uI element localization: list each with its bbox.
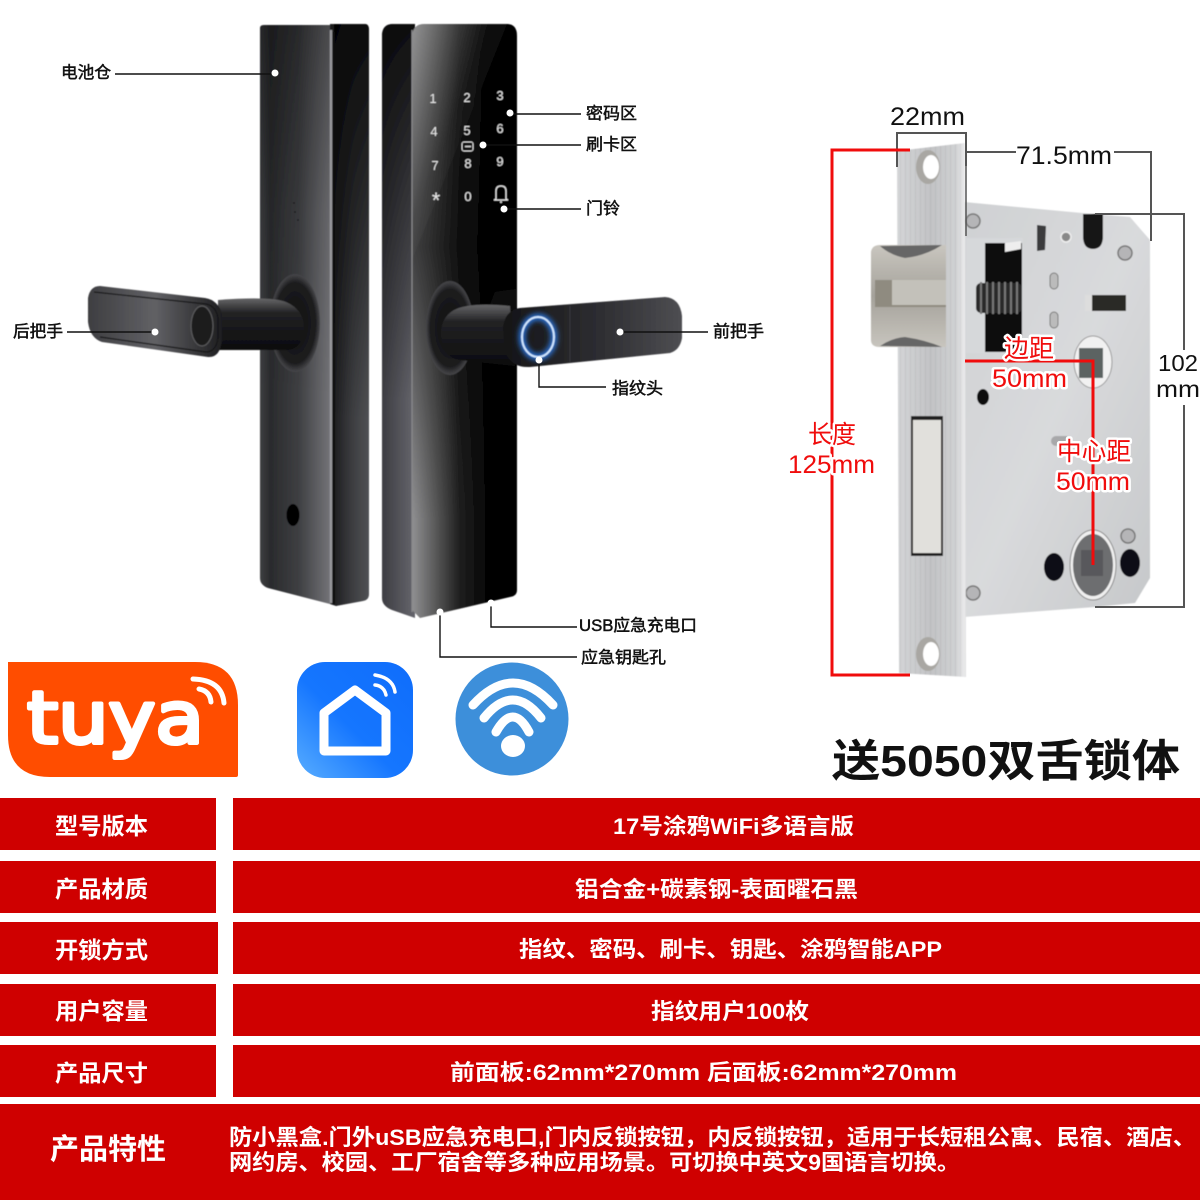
dimension: backset and center distance: 中心距 [1057,438,1131,466]
back handle neck [218,298,304,350]
dimension: backset and center distance: 50mm [1056,468,1130,496]
back panel top shading [260,25,330,400]
label: card area: 刷卡区 [586,135,637,154]
label: fingerprint head [536,356,663,398]
spec row: unlock method: 开锁方式 [55,937,148,963]
back panel front face [260,25,330,604]
spec row: model: 17号涂鸦WiFi多语言版 [613,814,854,839]
keypad [429,88,508,213]
front handle lever [503,297,682,367]
latch bolt [871,245,946,347]
back panel side face [330,24,369,606]
keypad: * [432,188,441,213]
spec row: model: 型号版本 [55,813,148,839]
keypad: 6 [496,121,504,136]
spec row: size: 前面板:62mm*270mm 后面板:62mm*270mm [450,1060,957,1085]
label: passcode area: 密码区 [586,104,637,123]
dimension: backset and center distance: 50mm [992,365,1067,393]
keypad: 2 [463,90,471,105]
spec row: user capacity [0,984,1200,1036]
label: front handle: 前把手 [713,322,764,341]
icon: tuya logo: tuya [27,676,204,760]
case holes and slots [977,214,1140,581]
spec row: material: 铝合金+碳素钢-表面曜石黑 [575,877,858,902]
spec row: user capacity: 指纹用户100枚 [651,999,809,1024]
dimension: length 125mm [788,150,910,675]
spec panel: features: 产品特性 [50,1133,166,1166]
dimension: 22mm: 22mm [890,103,965,131]
front panel gloss [412,24,507,260]
spec row: material: 产品材质 [55,876,148,902]
spec panel: features: 网约房、校园、工厂宿舍等多种应用场景。可切换中英文9国语言切换。 [229,1150,960,1175]
keypad: 4 [430,124,438,139]
fingerprint ring [522,317,554,357]
deadbolt [911,416,943,556]
screws [966,214,1135,600]
label: front handle [616,322,764,341]
keypad: 1 [429,91,437,106]
keypad: 9 [496,154,504,169]
front panel side shading [382,24,415,400]
lock case window [966,238,1023,353]
spec row: model [0,798,1200,850]
front panel glass face [412,24,517,618]
front panel glass shading [412,24,517,520]
label: passcode area [506,104,637,123]
dimension: 22mm [890,103,966,236]
spec row: size [0,1045,1200,1097]
dimension: length 125mm: 长度 [808,421,856,449]
spec panel: features [0,1104,1200,1200]
label: emergency keyhole [436,608,666,667]
icon: tuya logo [8,662,238,777]
label: USB emergency port [488,600,697,635]
dimension: 71.5mm: 71.5mm [1016,142,1112,170]
label: emergency keyhole: 应急钥匙孔 [581,648,666,667]
icon: smart home app [297,662,413,778]
spring [976,282,1022,314]
label: battery compartment [61,63,278,82]
keypad: 3 [496,88,504,103]
keypad: 7 [431,158,439,173]
back handle lever [88,286,222,357]
dimension: 71.5mm [966,142,1151,241]
label: USB emergency port: USB应急充电口 [579,616,697,635]
faceplate [897,143,966,677]
spec row: material [0,861,1200,913]
cylinder hole [1070,530,1116,600]
speaker dots [293,202,299,221]
front handle neck [441,305,515,366]
callout labels [13,63,764,667]
label: rear handle: 后把手 [13,322,63,341]
dimension: 102mm: mm [1156,376,1200,402]
dimension: backset and center distance: 边距 [1004,335,1054,363]
dimension: 102mm: 102 [1158,350,1198,376]
spindle hole [1074,336,1112,388]
heading: free 5050 lock body: 送5050双舌锁体 [832,737,1180,786]
label: doorbell [500,199,620,218]
front panel side face [382,24,415,618]
icon: wifi [456,662,568,776]
dimension: backset and center distance [965,335,1131,565]
back handle button [191,306,213,346]
spec panel: features: 防小黑盒.门外uSB应急充电口,门内反锁按钮，内反锁按钮，适用于长短租公寓、民宿、酒店、 [229,1125,1196,1150]
product: mortise lock body [871,143,1150,677]
spec row: unlock method: 指纹、密码、刷卡、钥匙、涂鸦智能APP [519,937,942,962]
back panel edge highlight [330,30,332,603]
label: card area [480,135,637,154]
keypad: 5 [463,123,471,138]
lock case plate [964,202,1150,617]
back panel side shading [334,24,369,420]
product: back lock panel [88,24,369,606]
key hole [286,504,300,526]
mounting holes [916,150,940,671]
back rose [270,274,320,372]
label: rear handle [13,322,158,341]
keypad: 0 [464,189,472,204]
dimension: 102mm [1095,214,1200,607]
spec row: size: 产品尺寸 [55,1060,148,1086]
label: fingerprint head: 指纹头 [612,379,663,398]
label: doorbell: 门铃 [586,199,620,218]
spec row: unlock method [0,922,1200,974]
dimension: length 125mm: 125mm [788,451,875,479]
product: front lock panel [382,24,682,618]
front rose [426,281,474,375]
label: battery compartment: 电池仓 [61,63,112,82]
keypad: 8 [464,156,472,171]
spec row: user capacity: 用户容量 [55,998,148,1024]
